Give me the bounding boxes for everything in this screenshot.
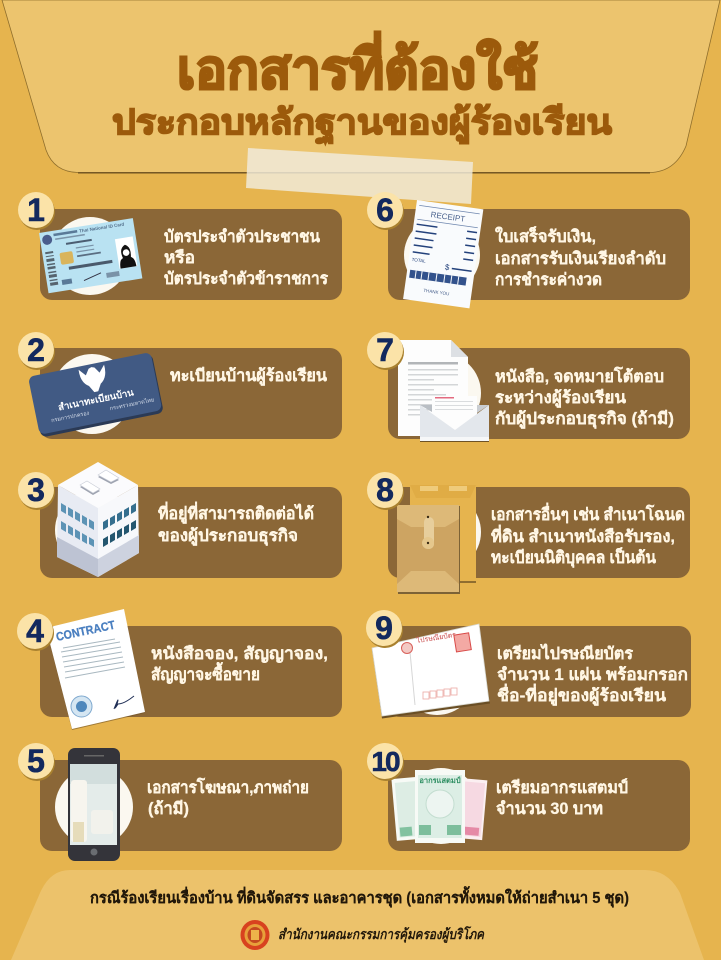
icon: house registration book: กระทรวงมหาดไทย [109,396,155,412]
text: item 5 [147,777,309,818]
badge: 7: 7 [376,332,394,368]
card 4 [17,609,342,730]
badge: 5: 5 [27,743,45,779]
text: item 3: ที่อยู่ที่สามารถติดต่อได้ [158,501,314,525]
icon: ID card [39,217,142,295]
title: เอกสารที่ต้องใช้ [177,31,538,100]
text: item 8: ที่ดิน สำเนาหนังสือรับรอง, [491,524,675,546]
card 10 [367,743,690,851]
card 8 [367,472,690,594]
badge: 7 [367,332,404,370]
badge: 1: 1 [27,192,45,228]
text: item 5: เอกสารโฆษณา,ภาพถ่าย [147,777,309,797]
text: item 6 [495,225,666,289]
text: item 4: หนังสือจอง, สัญญาจอง, [151,644,328,664]
card 5 [18,743,342,861]
text: item 7 [495,366,674,430]
icon: receipt [403,200,483,308]
icon: receipt: TOTAL [411,257,426,264]
text: item 9: เตรียมไปรษณียบัตร [497,643,633,663]
badge: 9 [366,610,403,648]
badge: 10 [367,743,404,781]
card 7 [367,332,690,442]
badge: 2 [18,332,55,370]
panel: footer [11,870,704,960]
card 9 [366,610,691,718]
icon: phone [55,748,133,861]
badge: 5 [18,743,55,781]
badge: 2: 2 [27,332,45,368]
tape [246,148,473,204]
icon: postcard: ไปรษณียบัตร [415,630,457,645]
badge: 4: 4 [26,613,44,649]
badge: 1 [18,192,55,230]
card 3 [18,462,342,578]
badge: 6: 6 [376,192,394,228]
card 6 [367,192,690,308]
text: item 6: การชำระค่างวด [495,271,602,289]
text: item 7: หนังสือ, จดหมายโต้ตอบ [495,366,664,386]
text: item 10 [496,778,628,818]
icon: receipt: $ [444,263,451,272]
badge: 9: 9 [375,610,393,646]
icon: ID card: Thai National ID Card [79,222,125,234]
badge: 8: 8 [376,472,394,508]
card 1 [18,192,342,300]
text: item 10: จำนวน 30 บาท [496,800,603,818]
text: item 1 [164,228,328,288]
icon: receipt: THANK YOU [423,288,450,296]
badge: 3 [18,472,55,510]
badge: 3: 3 [27,472,45,508]
text: item 1: บัตรประจำตัวประชาชน [164,228,321,246]
badge: 10: 10 [371,746,400,777]
badge: 4 [17,613,54,651]
text: item 5: (ถ้ามี) [148,799,189,818]
text: item 6: ใบเสร็จรับเงิน, [495,225,596,246]
text: item 3 [158,501,314,547]
icon: receipt: RECEIPT [430,210,466,224]
icon: postcard [372,624,490,718]
text: item 9: ชื่อ-ที่อยู่ของผู้ร้องเรียน [497,683,667,707]
text: item 3: ของผู้ประกอบธุรกิจ [158,526,298,547]
text: item 9: จำนวน 1 แผ่น พร้อมกรอก [497,666,688,684]
text: item 6: เอกสารรับเงินเรียงลำดับ [495,249,666,268]
text: item 8: ทะเบียนนิติบุคคล เป็นต้น [491,546,657,568]
icon: contract [46,609,145,730]
icon: document and envelope [398,340,489,442]
panel: header [2,0,720,173]
icon: house registration book: สำเนาทะเบียนบ้าน [57,386,135,413]
title: ประกอบหลักฐานของผู้ร้องเรียน [112,103,612,145]
text: item 8 [491,502,685,568]
agency name: สำนักงานคณะกรรมการคุ้มครองผู้บริโภค [278,925,485,943]
text: item 10: เตรียมอากรแสตมป์ [496,778,628,797]
text: item 1: บัตรประจำตัวข้าราชการ [164,270,328,288]
text: item 2: ทะเบียนบ้านผู้ร้องเรียน [170,366,328,387]
icon: building [55,462,139,577]
text: item 1: หรือ [164,248,195,267]
text: item 7: กับผู้ประกอบธุรกิจ (ถ้ามี) [495,409,674,430]
footer note: กรณีร้องเรียนเรื่องบ้าน ที่ดินจัดสรร และอาคารชุด (เอกสารทั้งหมดให้ถ่ายสำเนา 5 ชุด) [90,886,629,908]
icon: agency seal [240,920,270,950]
card 2 [18,332,342,439]
text: item 4 [151,644,328,685]
icon: contract: CONTRACT [55,618,117,644]
icon: house registration book: กรมการปกครอง [50,410,90,424]
icon: envelopes [397,485,481,594]
text: item 4: สัญญาจะซื้อขาย [151,662,260,685]
badge: 6 [367,192,404,230]
icon: stamps [391,768,487,844]
text: item 7: ระหว่างผู้ร้องเรียน [495,388,627,409]
text: item 9 [497,643,688,707]
title [112,31,612,145]
text: item 8: เอกสารอื่นๆ เช่น สำเนาโฉนด [491,502,685,524]
badge: 8 [367,472,404,510]
icon: stamps: อากรแสตมป์ [419,776,461,785]
icon: house registration book [28,352,164,438]
